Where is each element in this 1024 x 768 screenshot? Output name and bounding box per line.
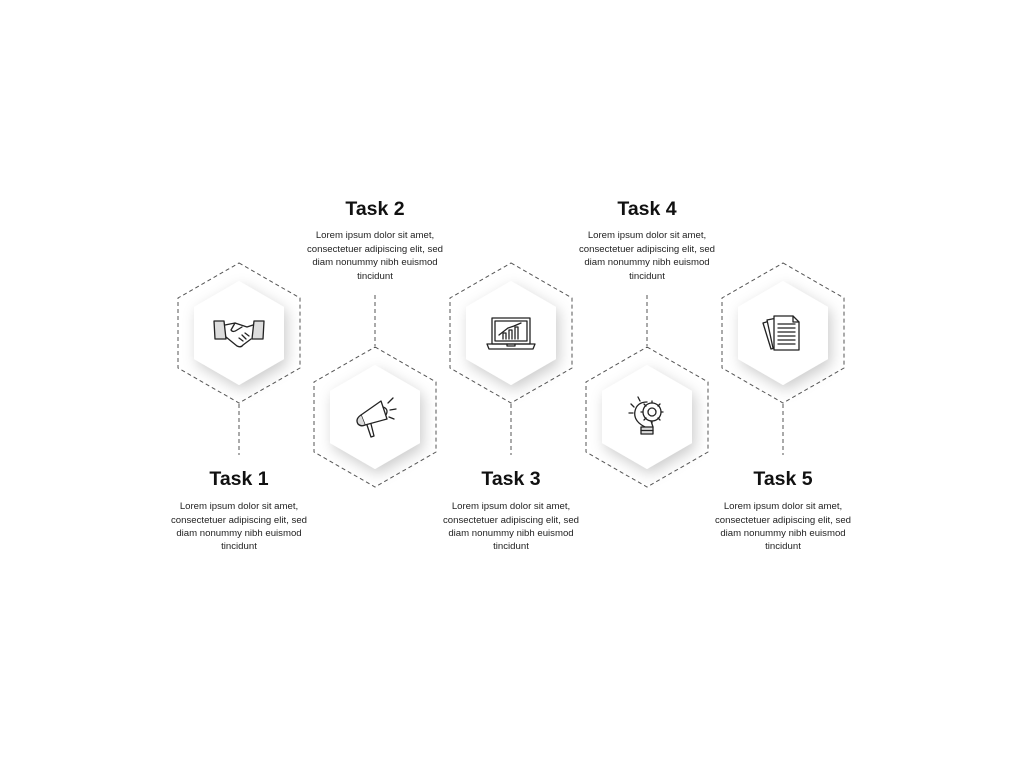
icon: laptop chart	[487, 318, 535, 349]
text: task 4: consectetuer adipiscing elit, sed	[579, 244, 715, 255]
icon: handshake	[214, 321, 264, 347]
hexagon: task 2 megaphone	[314, 347, 436, 487]
text: task 4: diam nonummy nibh euismod	[584, 257, 710, 268]
icon: documents	[763, 316, 799, 350]
connector lines	[239, 295, 783, 455]
text: task 1: Lorem ipsum dolor sit amet,	[180, 501, 298, 512]
text: task 3: tincidunt	[493, 541, 529, 552]
text: task 1: consectetuer adipiscing elit, sed	[171, 515, 307, 526]
hexagon: task 3 laptop	[450, 263, 572, 403]
text: task 1: diam nonummy nibh euismod	[176, 528, 302, 539]
text: task 2: Task 2	[345, 198, 405, 220]
text: task 5: tincidunt	[765, 541, 801, 552]
text: task 3: diam nonummy nibh euismod	[448, 528, 574, 539]
text: task 1: tincidunt	[221, 541, 257, 552]
text: task 3: Lorem ipsum dolor sit amet,	[452, 501, 570, 512]
text: task 5	[715, 468, 851, 552]
text: task 2: consectetuer adipiscing elit, sed	[307, 244, 443, 255]
text: task 3	[443, 468, 579, 552]
text: task 2: Lorem ipsum dolor sit amet,	[316, 230, 434, 241]
text: task 5: consectetuer adipiscing elit, sed	[715, 515, 851, 526]
hexagon: task 5 documents	[722, 263, 844, 403]
text: task 2: diam nonummy nibh euismod	[312, 257, 438, 268]
text: task 2: tincidunt	[357, 271, 393, 282]
hexagon: task 4 bulb gear	[586, 347, 708, 487]
text: task 4	[579, 198, 715, 282]
text: task 2	[307, 198, 443, 282]
text: task 3: consectetuer adipiscing elit, sed	[443, 515, 579, 526]
text: task 1: Task 1	[209, 468, 269, 490]
text: task 4: tincidunt	[629, 271, 665, 282]
text: task 1	[171, 468, 307, 552]
text: task 4: Lorem ipsum dolor sit amet,	[588, 230, 706, 241]
icon: lightbulb with gear	[629, 397, 663, 434]
icon: megaphone	[357, 398, 396, 437]
text: task 5: Task 5	[753, 468, 813, 490]
text: task 3: Task 3	[481, 468, 541, 490]
hexagon: task 1 handshake	[178, 263, 300, 403]
text: task 4: Task 4	[617, 198, 677, 220]
text: task 5: diam nonummy nibh euismod	[720, 528, 846, 539]
text: task 5: Lorem ipsum dolor sit amet,	[724, 501, 842, 512]
